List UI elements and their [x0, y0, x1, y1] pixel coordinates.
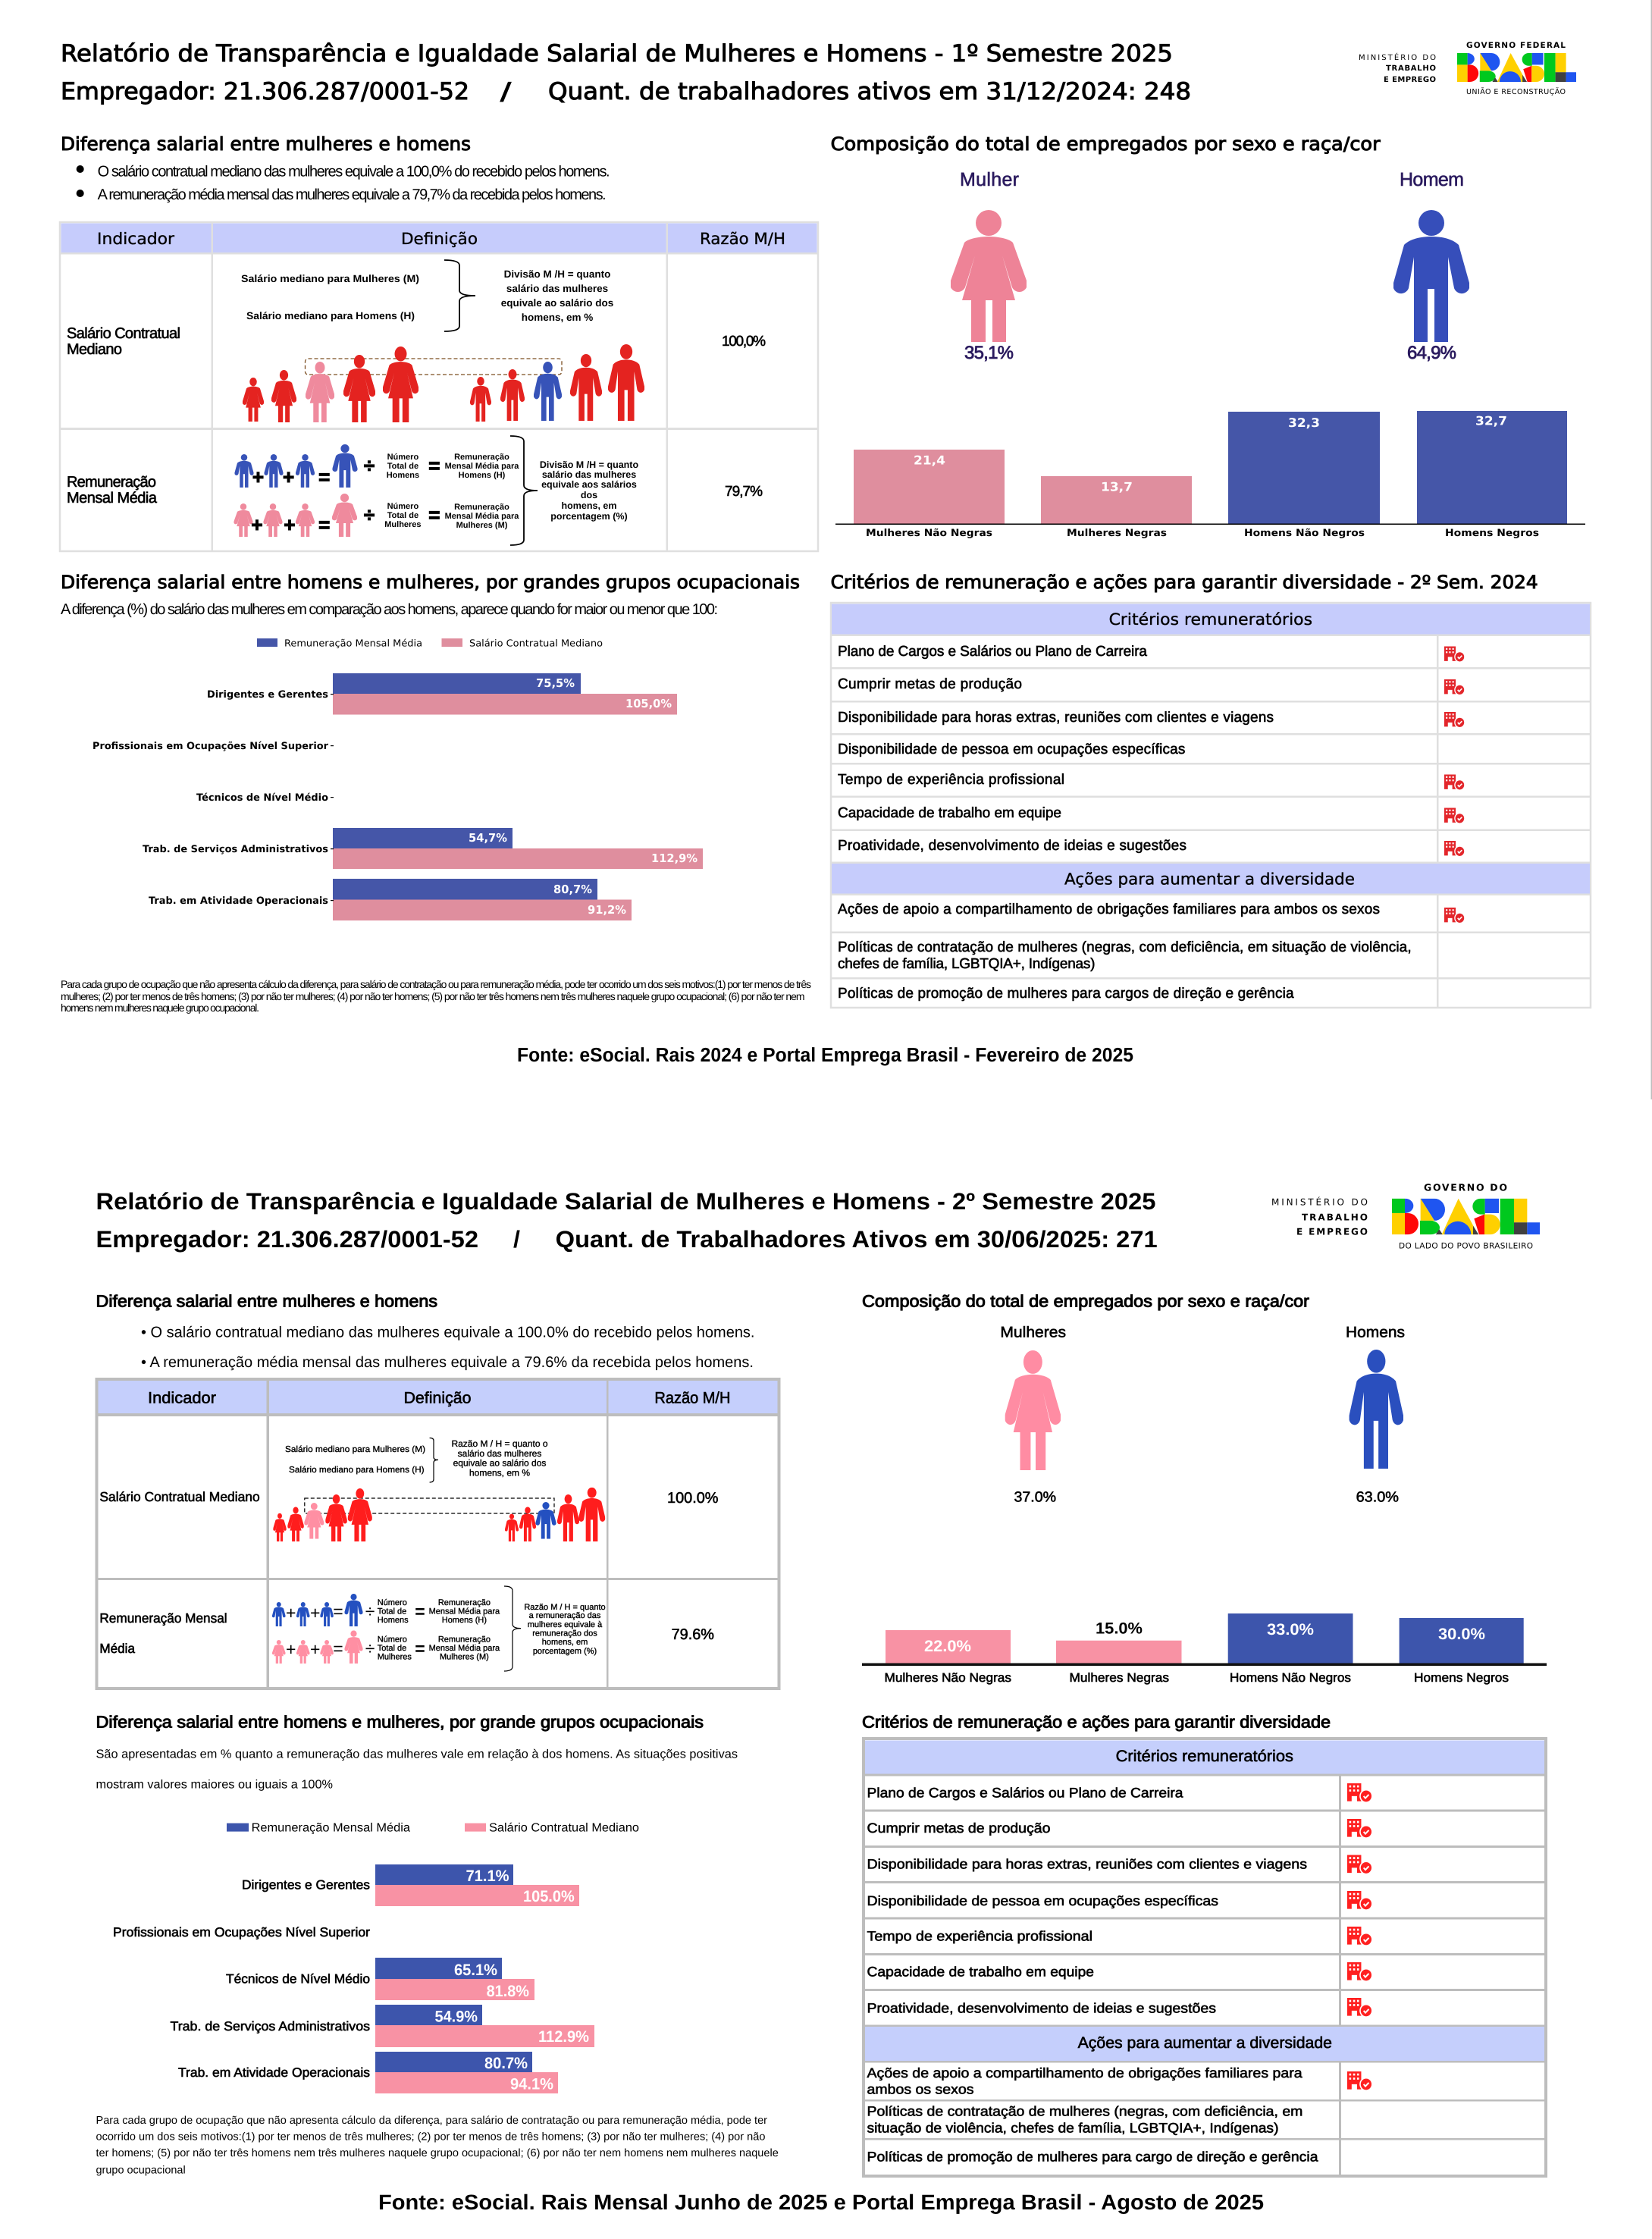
footnote: ter homens; (5) por não ter três homens nem três mulheres naquele grupo ocupacional; (6) por não ter nem homens nem mulheres naquele — [96, 2147, 779, 2159]
definition: remuneração média: ÷ — [365, 1638, 375, 1658]
legend — [227, 1821, 639, 1835]
bar chart: raça/cor: Homens Não Negros — [1244, 528, 1365, 539]
row label: salário contratual mediano: Salário Contratual — [67, 325, 180, 342]
action rows: Políticas de contratação de mulheres (negras, com deficiência, em — [867, 2104, 1302, 2119]
definition: remuneração média: Total de — [378, 1644, 406, 1653]
definition: remuneração média: + — [283, 466, 294, 488]
logo: ministério e governo do brasil: GOVERNO DO — [1424, 1181, 1507, 1193]
definition: remuneração média: + — [252, 466, 264, 488]
definition: remuneração média: Homens — [387, 471, 419, 480]
table header: Razão M/H — [700, 230, 785, 248]
summary bullets: • O salário contratual mediano das mulheres equivale a 100.0% do recebido pelos homens. — [141, 1324, 755, 1341]
definition: salário mediano: Salário mediano para Homens (H) — [246, 310, 415, 321]
bar chart: raça/cor: Homens Negros — [1445, 528, 1539, 539]
value: razão remuneração: 79.6% — [672, 1626, 714, 1643]
heading: diferença salarial: Diferença salarial entre mulheres e homens — [61, 133, 471, 155]
bar chart: raça/cor: Mulheres Negras — [1067, 528, 1167, 539]
legend: Remuneração Mensal Média — [252, 1821, 410, 1835]
title: report 1: Empregador: 21.306.287/0001-52 — [61, 78, 469, 105]
title: report 1 — [61, 40, 1191, 105]
heading: composição: Composição do total de empregados por sexo e raça/cor — [862, 1291, 1309, 1310]
report 1: first semester — [60, 40, 1591, 1066]
definition: remuneração média: Mensal Média para — [445, 462, 519, 471]
bar chart: grupos ocupacionais: 91,2% — [588, 903, 626, 917]
title: report 2: / — [513, 1226, 520, 1253]
title: report 1: Quant. de trabalhadores ativos em 31/12/2024: 248 — [548, 78, 1191, 105]
bar chart: raça/cor: 32,3 — [1288, 416, 1320, 430]
bar chart: raça/cor: 13,7 — [1101, 479, 1133, 494]
definition: remuneração média: = — [318, 513, 330, 536]
bar chart: grupos ocupacionais: 75,5% — [536, 676, 575, 690]
bar chart: grupos ocupacionais: Trab. de Serviços Administrativos — [143, 844, 328, 855]
heading: composição: Composição do total de empregados por sexo e raça/cor — [831, 133, 1381, 155]
value: razão remuneração: 79,7% — [725, 484, 763, 500]
action rows — [838, 902, 1412, 1002]
composition: mulher — [950, 169, 1027, 363]
bar chart: grupos ocupacionais: Profissionais em Ocupações Nível Superior — [92, 741, 329, 752]
bar chart: raça/cor: 30.0% — [1438, 1626, 1485, 1643]
definition: remuneração média: Mensal Média para — [429, 1607, 500, 1616]
bar chart: grupos ocupacionais — [92, 673, 703, 920]
definition: remuneração média: porcentagem (%) — [533, 1647, 597, 1656]
definition: remuneração média: Remuneração — [438, 1635, 491, 1644]
definition: remuneração média: dos — [581, 490, 597, 500]
row label: remuneração mensal média — [67, 474, 158, 506]
definition: remuneração média: Número — [378, 1598, 407, 1607]
table header: Razão M/H — [654, 1390, 730, 1407]
definition: remuneração média: Mensal Média para — [445, 512, 519, 521]
definition: salário mediano: salário das mulheres — [506, 283, 608, 294]
definition: remuneração média: + — [286, 1639, 296, 1659]
subtitle: grupos ocupacionais: A diferença (%) do salário das mulheres em comparação aos homens, aparece quando for maior ou menor que 100: — [61, 601, 718, 618]
bar chart: raça/cor: Mulheres Não Negras — [866, 528, 992, 539]
logo: ministério e governo do brasil: DO LADO DO POVO BRASILEIRO — [1399, 1242, 1533, 1251]
logo: ministério e governo do brasil: TRABALHO — [1302, 1212, 1368, 1222]
criteria rows: Proatividade, desenvolvimento de ideias e sugestões — [838, 838, 1186, 854]
row label: remuneração mensal média: Mensal Média — [67, 490, 158, 506]
bar chart: raça/cor: 22.0% — [924, 1638, 971, 1655]
subtitle: grupos ocupacionais: mostram valores maiores ou iguais a 100% — [96, 1779, 333, 1792]
title: report 1: Relatório de Transparência e Igualdade Salarial de Mulheres e Homens - 1º Semestre 2025 — [61, 40, 1173, 67]
action rows: ambos os sexos — [867, 2082, 973, 2097]
heading: diferença salarial: Diferença salarial entre mulheres e homens — [96, 1291, 437, 1310]
criteria rows — [867, 1785, 1307, 2016]
row label: salário contratual mediano: Mediano — [67, 341, 122, 358]
action rows: Ações de apoio a compartilhamento de obrigações familiares para — [867, 2065, 1303, 2081]
definition: remuneração média: mulheres equivale à — [528, 1620, 603, 1629]
definition: remuneração média: Divisão M /H = quanto — [540, 459, 638, 470]
definition: remuneração média: Homens (H) — [459, 471, 506, 480]
footnote — [96, 2115, 779, 2177]
criteria rows — [838, 644, 1274, 854]
criteria rows: Cumprir metas de produção — [838, 676, 1022, 692]
bar chart: grupos ocupacionais: 81.8% — [487, 1983, 529, 2000]
definition: remuneração média: homens, em — [562, 500, 616, 511]
bar chart: raça/cor: Mulheres Não Negras — [884, 1671, 1011, 1685]
table: indicadores — [60, 222, 818, 551]
legend: Salário Contratual Mediano — [489, 1821, 639, 1835]
footnote: mulheres; (2) por ter menos de três homens; (3) por não ter mulheres; (4) por não ter homens; (5) por não ter três homens nem três mulheres naquele grupo ocupacional; (6) por não ter nem — [61, 990, 805, 1002]
criteria rows: Disponibilidade de pessoa em ocupações específicas — [867, 1893, 1218, 1908]
row label: remuneração mensal média: Média — [99, 1641, 135, 1656]
criteria rows: Disponibilidade de pessoa em ocupações específicas — [838, 742, 1185, 757]
section header: critérios remuneratórios: Critérios remuneratórios — [1109, 610, 1312, 629]
bar chart: grupos ocupacionais: Técnicos de Nível Médio — [226, 1972, 370, 1987]
definition: remuneração média: Homens — [378, 1616, 409, 1625]
criteria rows: Plano de Cargos e Salários ou Plano de Carreira — [867, 1785, 1184, 1800]
table header — [148, 1390, 730, 1407]
action rows: chefes de família, LGBTQIA+, Indígenas) — [838, 956, 1095, 972]
definition: remuneração média: Remuneração — [454, 453, 509, 462]
title: report 2: Empregador: 21.306.287/0001-52 — [96, 1226, 478, 1253]
footnote: grupo ocupacional — [96, 2165, 186, 2177]
definition: remuneração média: Mensal Média para — [429, 1644, 500, 1653]
criteria rows: Tempo de experiência profissional — [867, 1929, 1092, 1944]
bar chart: raça/cor: Homens Negros — [1414, 1671, 1509, 1685]
definition: remuneração média — [234, 436, 638, 545]
row label: remuneração mensal média: Remuneração — [67, 474, 156, 491]
composition: mulheres: Mulheres — [1000, 1324, 1066, 1341]
table: critérios — [864, 1739, 1546, 2176]
bar chart: grupos ocupacionais: Profissionais em Ocupações Nível Superior — [113, 1925, 370, 1940]
table: indicadores — [97, 1379, 779, 1689]
bar chart: grupos ocupacionais: 105.0% — [523, 1888, 575, 1905]
action rows — [867, 2065, 1319, 2165]
footnote: ocorrido um dos seis motivos:(1) por ter menos de três mulheres; (2) por ter menos de três homens; (3) por não ter mulheres; (4) por não — [96, 2131, 765, 2143]
logo: ministério e governo do brasil: E EMPREGO — [1296, 1227, 1368, 1237]
logo: ministério e governo federal: UNIÃO E RECONSTRUÇÃO — [1466, 87, 1566, 96]
logo: ministério e governo do brasil: MINISTÉRIO DO — [1271, 1196, 1368, 1207]
bar chart: raça/cor: 33.0% — [1267, 1621, 1314, 1638]
definition: salário mediano: equivale ao salário dos — [501, 297, 613, 309]
bar chart: grupos ocupacionais: 105,0% — [625, 697, 672, 710]
composition: homem — [1393, 169, 1470, 363]
criteria rows: Proatividade, desenvolvimento de ideias e sugestões — [867, 2001, 1216, 2016]
bar chart: grupos ocupacionais: Trab. de Serviços Administrativos — [170, 2019, 370, 2034]
definition: remuneração média: homens, em — [542, 1638, 588, 1647]
definition: salário mediano: equivale ao salário dos — [453, 1458, 546, 1469]
definition: remuneração média: Remuneração — [454, 503, 509, 512]
table header: Indicador — [148, 1390, 216, 1407]
footnote: homens nem mulheres naquele grupo ocupacional. — [61, 1002, 259, 1014]
table header — [97, 230, 785, 248]
value: razão salário: 100,0% — [722, 334, 766, 350]
bar chart: raça/cor: 15.0% — [1096, 1620, 1143, 1638]
definition: remuneração média: = — [415, 1601, 425, 1621]
bar chart: grupos ocupacionais: Técnicos de Nível Médio — [196, 792, 328, 804]
criteria rows: Capacidade de trabalho em equipe — [838, 805, 1061, 821]
subtitle: grupos ocupacionais — [96, 1748, 738, 1792]
definition: remuneração média: Remuneração — [438, 1598, 491, 1607]
dashed median box — [305, 359, 562, 375]
heading: critérios: Critérios de remuneração e ações para garantir diversidade — [862, 1713, 1331, 1732]
definition: salário mediano: homens, em % — [469, 1468, 530, 1479]
icons: critérios adotados — [1347, 1783, 1373, 2091]
dashed median box — [305, 1498, 554, 1513]
bar chart: grupos ocupacionais: Dirigentes e Gerentes — [242, 1877, 370, 1892]
footnote: Para cada grupo de ocupação que não apresenta cálculo da diferença, para salário de contratação ou para remuneração média, pode ter ocorrido um dos seis motivos:(1) por ter menos de três — [61, 978, 811, 990]
bar chart: grupos ocupacionais: Trab. em Atividade Operacionais — [178, 2065, 370, 2080]
bar chart: raça/cor — [862, 1613, 1547, 1685]
bar chart: grupos ocupacionais: 54.9% — [435, 2009, 478, 2026]
composition: homens: 63.0% — [1356, 1489, 1399, 1506]
definition: remuneração média: Número — [378, 1635, 407, 1644]
bar chart: raça/cor: 21,4 — [914, 453, 945, 467]
row label: remuneração mensal média: Remuneração Mensal — [99, 1610, 227, 1626]
heading: critérios: Critérios de remuneração e ações para garantir diversidade - 2º Sem. 2024 — [831, 572, 1538, 593]
title: report 1: / — [500, 78, 512, 105]
definition: remuneração média: = — [318, 466, 330, 488]
action rows: Ações de apoio a compartilhamento de obrigações familiares para ambos os sexos — [838, 902, 1380, 917]
definition: remuneração média: = — [333, 1638, 343, 1658]
logo: ministério e governo federal: TRABALHO — [1386, 64, 1436, 73]
definition: remuneração média: a remuneração das — [529, 1611, 601, 1620]
criteria rows: Cumprir metas de produção — [867, 1820, 1051, 1836]
definition: remuneração média: porcentagem (%) — [550, 511, 628, 522]
title: report 2: Quant. de Trabalhadores Ativos em 30/06/2025: 271 — [556, 1226, 1158, 1253]
bar chart: grupos ocupacionais: 80.7% — [484, 2055, 528, 2072]
definition: remuneração média: = — [428, 503, 440, 526]
definition: remuneração média — [272, 1586, 606, 1671]
heading: grupos ocupacionais: Diferença salarial entre homens e mulheres, por grandes grupos ocupacionais — [61, 572, 800, 593]
bar chart: grupos ocupacionais: 112,9% — [651, 851, 697, 865]
definition: remuneração média: ÷ — [364, 454, 375, 477]
definition: salário mediano: salário das mulheres — [458, 1448, 541, 1459]
composition: homem: Homem — [1400, 169, 1464, 190]
bar chart: raça/cor: Mulheres Negras — [1069, 1671, 1169, 1685]
bar chart: grupos ocupacionais: 112.9% — [538, 2028, 589, 2046]
definition: remuneração média: + — [251, 513, 263, 536]
definition: remuneração média: Total de — [387, 462, 418, 471]
criteria rows: Disponibilidade para horas extras, reuniões com clientes e viagens — [838, 710, 1274, 726]
definition: remuneração média: Mulheres (M) — [440, 1653, 489, 1662]
section header: ações: Ações para aumentar a diversidade — [1064, 870, 1355, 889]
definition: remuneração média: Total de — [387, 511, 418, 520]
bar chart: grupos ocupacionais: 54,7% — [469, 831, 507, 845]
definition: salário mediano: Razão M / H = quanto o — [451, 1438, 548, 1449]
table header: Indicador — [97, 230, 174, 248]
legend: Salário Contratual Mediano — [469, 637, 603, 649]
bar chart: grupos ocupacionais: 94.1% — [510, 2076, 553, 2093]
source line: Fonte: eSocial. Rais 2024 e Portal Emprega Brasil - Fevereiro de 2025 — [517, 1043, 1133, 1066]
action rows: situação de violência, chefes de família, LGBTQIA+, Indígenas) — [867, 2120, 1278, 2135]
section header: ações: Ações para aumentar a diversidade — [1078, 2034, 1332, 2052]
table: critérios — [831, 603, 1591, 1008]
composition: mulheres: 37.0% — [1014, 1489, 1056, 1506]
definition: remuneração média: Mulheres (M) — [456, 521, 508, 530]
criteria rows: Plano de Cargos e Salários ou Plano de Carreira — [838, 644, 1147, 660]
composition: mulher: Mulher — [960, 169, 1019, 190]
bar chart: grupos ocupacionais: 71.1% — [466, 1867, 509, 1885]
criteria rows: Capacidade de trabalho em equipe — [867, 1964, 1094, 1979]
definition: remuneração média: + — [284, 513, 296, 536]
logo: ministério e governo do brasil — [1271, 1181, 1540, 1251]
table header: Definição — [401, 230, 478, 248]
definition: salário mediano — [285, 1438, 548, 1482]
definition: remuneração média: = — [428, 454, 440, 477]
title: report 2: Relatório de Transparência e Igualdade Salarial de Mulheres e Homens - 2º Semestre 2025 — [96, 1188, 1156, 1215]
legend — [257, 637, 603, 649]
definition: salário mediano: Salário mediano para Mulheres (M) — [241, 273, 419, 284]
source line: Fonte: eSocial. Rais Mensal Junho de 2025 e Portal Emprega Brasil - Agosto de 2025 — [378, 2190, 1264, 2214]
definition: salário mediano: homens, em % — [522, 312, 593, 323]
composition: mulheres — [1000, 1324, 1066, 1506]
bar chart: raça/cor — [835, 411, 1585, 539]
definition: remuneração média: Número — [387, 453, 418, 462]
definition: salário mediano: Divisão M /H = quanto — [504, 268, 610, 280]
action rows: Políticas de promoção de mulheres para cargo de direção e gerência — [867, 2150, 1319, 2165]
legend: Remuneração Mensal Média — [284, 637, 422, 649]
bar chart: raça/cor: Homens Não Negros — [1230, 1671, 1351, 1685]
definition: remuneração média: = — [333, 1601, 343, 1621]
definition: remuneração média: ÷ — [364, 503, 375, 526]
bar chart: grupos ocupacionais: 65.1% — [454, 1961, 497, 1979]
definition: salário mediano — [241, 260, 613, 331]
definition: remuneração média: Número — [387, 502, 418, 511]
icons: women and men line-up — [243, 344, 644, 422]
definition: salário mediano: Salário mediano para Homens (H) — [289, 1466, 425, 1475]
bar chart: grupos ocupacionais: Trab. em Atividade Operacionais — [149, 895, 328, 907]
logo: ministério e governo federal — [1359, 41, 1576, 96]
summary bullets: • A remuneração média mensal das mulheres equivale a 79.6% da recebida pelos homens. — [141, 1354, 754, 1371]
summary bullets — [141, 1324, 755, 1371]
row label: remuneração mensal média — [99, 1610, 227, 1656]
action rows: Políticas de promoção de mulheres para cargos de direção e gerência — [838, 986, 1294, 1002]
definition: remuneração média: = — [415, 1638, 425, 1658]
title: report 2 — [96, 1188, 1158, 1253]
definition: remuneração média: Mulheres — [378, 1653, 412, 1662]
definition: remuneração média: salário das mulheres — [542, 469, 636, 480]
definition: remuneração média: equivale aos salários — [541, 479, 637, 490]
definition: remuneração média: Mulheres — [384, 520, 422, 529]
definition: remuneração média: + — [286, 1603, 296, 1623]
definition: remuneração média: + — [310, 1603, 320, 1623]
value: razão salário: 100.0% — [667, 1490, 719, 1507]
composition: mulher: 35,1% — [964, 343, 1014, 363]
bar chart: grupos ocupacionais — [113, 1864, 594, 2093]
row label: salário contratual mediano: Salário Contratual Mediano — [99, 1489, 260, 1504]
report 2: second semester — [96, 1181, 1547, 2214]
definition: remuneração média: ÷ — [365, 1601, 375, 1621]
heading: grupos ocupacionais: Diferença salarial entre homens e mulheres, por grande grupos ocupacionais — [96, 1713, 704, 1732]
composition: homens — [1346, 1324, 1405, 1506]
composition: homens: Homens — [1346, 1324, 1405, 1341]
summary bullets: A remuneração média mensal das mulheres equivale a 79,7% da recebida pelos homens. — [98, 187, 607, 203]
footnote: Para cada grupo de ocupação que não apresenta cálculo da diferença, para salário de contratação ou para remuneração média, pode ter — [96, 2115, 767, 2127]
table header: Definição — [403, 1390, 472, 1407]
summary bullets: O salário contratual mediano das mulheres equivale a 100,0% do recebido pelos homens. — [98, 164, 610, 180]
definition: remuneração média: remuneração dos — [532, 1629, 597, 1638]
icons: critérios adotados — [1444, 646, 1465, 924]
definition: remuneração média: + — [310, 1639, 320, 1659]
criteria rows: Tempo de experiência profissional — [838, 772, 1064, 788]
definition: remuneração média: Total de — [378, 1607, 406, 1616]
bar chart: grupos ocupacionais: Dirigentes e Gerentes — [207, 689, 328, 701]
composition: homem: 64,9% — [1407, 343, 1456, 363]
logo: ministério e governo federal: E EMPREGO — [1384, 76, 1436, 84]
bar chart: raça/cor: 32,7 — [1475, 414, 1507, 428]
criteria rows: Disponibilidade para horas extras, reuniões com clientes e viagens — [867, 1857, 1307, 1872]
icons: women and men line-up — [273, 1488, 605, 1541]
logo: ministério e governo federal: GOVERNO FEDERAL — [1466, 41, 1566, 50]
footnote — [61, 978, 811, 1014]
bar chart: grupos ocupacionais: 80,7% — [553, 883, 592, 896]
logo: ministério e governo federal: MINISTÉRIO DO — [1359, 52, 1436, 62]
section header: critérios remuneratórios: Critérios remuneratórios — [1116, 1748, 1293, 1765]
definition: remuneração média: Homens (H) — [442, 1616, 487, 1625]
summary bullets — [77, 164, 610, 203]
row label: salário contratual mediano — [67, 325, 180, 358]
definition: remuneração média: Razão M / H = quanto — [524, 1603, 606, 1612]
action rows: Políticas de contratação de mulheres (negras, com deficiência, em situação de violência, — [838, 939, 1412, 955]
definition: salário mediano: Salário mediano para Mulheres (M) — [285, 1445, 425, 1454]
subtitle: grupos ocupacionais: São apresentadas em % quanto a remuneração das mulheres vale em relação à dos homens. As situações positivas — [96, 1748, 738, 1761]
